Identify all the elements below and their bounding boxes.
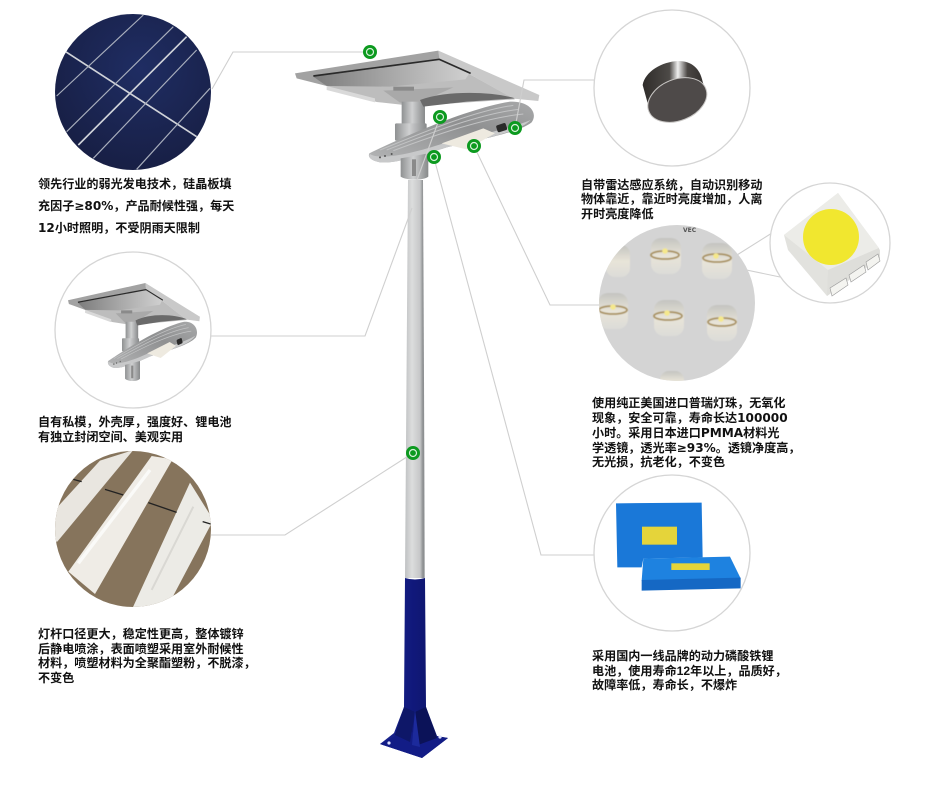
text: solar cell: 12小时照明，不受阴雨天限制 [38,220,200,235]
battery circle [594,475,750,631]
text: battery: 故障率低，寿命长，不爆炸 [592,677,737,692]
LED board photo: VEC [683,227,697,234]
pole tubes photo [52,450,213,613]
small lamp [68,283,200,381]
text: pole material [38,626,256,685]
panel: radar sensor [581,10,762,221]
panel: LED chip [770,183,890,303]
housing circle [55,252,211,408]
text: LED lens: 小时。采用日本进口PMMA材料光 [592,425,779,440]
text: housing: 自有私模，外壳厚，强度好、锂电池 [38,414,232,429]
text: LED lens: 无光损，抗老化，不变色 [592,454,725,469]
text: solar cell [38,176,234,235]
text: housing [38,414,232,444]
text: pole material: 后静电喷涂，表面喷塑采用室外耐候性 [38,641,244,656]
panel: pole material [38,450,256,685]
blue pole base [380,578,448,758]
text: radar sensor: 开时亮度降低 [581,206,654,221]
radar circle [594,10,750,166]
radar cylinder icon [641,61,713,131]
text: radar sensor [581,177,762,221]
LED board photo [598,225,755,391]
text: battery [592,648,787,692]
text: solar cell: 领先行业的弱光发电技术，硅晶板填 [38,176,232,191]
text: LED lens: 使用纯正美国进口普瑞灯珠，无氧化 [592,395,786,410]
leader lines [211,52,780,555]
SMD chip icon [784,193,880,296]
text: battery: 电池，使用寿命12年以上，品质好， [592,663,787,678]
text: radar sensor: 自带雷达感应系统，自动识别移动 [581,177,762,192]
text: radar sensor: 物体靠近，靠近时亮度增加，人离 [581,191,762,206]
chip circle [770,183,890,303]
text: LED lens: 现象，安全可靠，寿命长达100000 [592,410,788,425]
text: LED lens [592,395,800,469]
panel: battery [592,475,787,692]
solar cell photo [55,14,211,170]
street light pole [380,180,448,758]
panel: LED lens [592,225,800,469]
lamp head with solar panel [295,51,539,180]
text: pole material: 不变色 [38,670,74,685]
battery icon [616,503,741,591]
text: pole material: 灯杆口径更大，稳定性更高，整体镀锌 [38,626,244,641]
panel: housing [38,252,232,444]
text: housing: 有独立封闭空间、美观实用 [38,429,183,444]
text: pole material: 材料，喷塑材料为全聚酯塑粉，不脱漆， [38,655,256,670]
text: battery: 采用国内一线品牌的动力磷酸铁锂 [592,648,773,663]
panel: solar cell [38,14,234,235]
text: solar cell: 充因子≥80%，产品耐候性强，每天 [38,198,234,213]
text: LED lens: 学透镜，透光率≥93%。透镜净度高， [592,440,800,455]
marker dots [363,45,522,460]
